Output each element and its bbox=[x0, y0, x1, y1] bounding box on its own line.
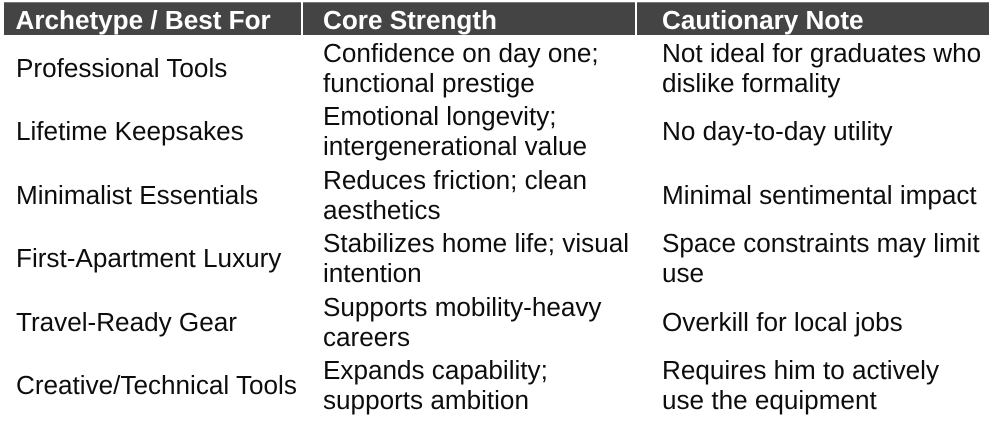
row 3 strength: aesthetics bbox=[323, 195, 440, 225]
row 4 strength: intention bbox=[323, 258, 422, 288]
row 3 strength bbox=[323, 165, 587, 225]
row 4 note: Space constraints may limit bbox=[662, 228, 980, 258]
header: core strength column bbox=[303, 2, 635, 35]
row 2 note: No day-to-day utility bbox=[662, 116, 893, 146]
row 2 archetype: Lifetime Keepsakes bbox=[16, 116, 244, 146]
header: cautionary note column: Cautionary Note bbox=[662, 5, 864, 35]
row 1 strength: Confidence on day one; bbox=[323, 38, 599, 68]
row 6 note: Requires him to actively bbox=[662, 355, 939, 385]
row 5 strength: Supports mobility-heavy bbox=[323, 292, 601, 322]
row 4 archetype: First-Apartment Luxury bbox=[16, 243, 281, 273]
header: archetype column: Archetype / Best For bbox=[16, 5, 271, 35]
row 5 archetype: Travel-Ready Gear bbox=[16, 307, 237, 337]
header: core strength column: Core Strength bbox=[323, 5, 497, 35]
row 3 note: Minimal sentimental impact bbox=[662, 180, 977, 210]
row 2 strength: Emotional longevity; bbox=[323, 101, 557, 131]
row 2 strength bbox=[323, 101, 587, 161]
row 6 strength bbox=[323, 355, 548, 415]
row 4 note bbox=[662, 228, 980, 288]
row 3 strength: Reduces friction; clean bbox=[323, 165, 587, 195]
row 5 note: Overkill for local jobs bbox=[662, 307, 903, 337]
row 6 note: use the equipment bbox=[662, 385, 877, 415]
row 2 strength: intergenerational value bbox=[323, 131, 587, 161]
row 6 strength: supports ambition bbox=[323, 385, 529, 415]
row 5 strength: careers bbox=[323, 322, 410, 352]
row 3 archetype: Minimalist Essentials bbox=[16, 180, 258, 210]
row 1 note bbox=[662, 38, 981, 98]
row 6 archetype: Creative/Technical Tools bbox=[16, 370, 297, 400]
row 1 archetype: Professional Tools bbox=[16, 53, 227, 83]
row 1 note: dislike formality bbox=[662, 68, 840, 98]
row 4 strength bbox=[323, 228, 629, 288]
row 1 note: Not ideal for graduates who bbox=[662, 38, 981, 68]
header: cautionary note column bbox=[637, 2, 989, 35]
row 1 strength bbox=[323, 38, 599, 98]
row 6 note bbox=[662, 355, 939, 415]
row 4 strength: Stabilizes home life; visual bbox=[323, 228, 629, 258]
row 4 note: use bbox=[662, 258, 704, 288]
row 1 strength: functional prestige bbox=[323, 68, 535, 98]
row 5 strength bbox=[323, 292, 602, 352]
row 6 strength: Expands capability; bbox=[323, 355, 548, 385]
